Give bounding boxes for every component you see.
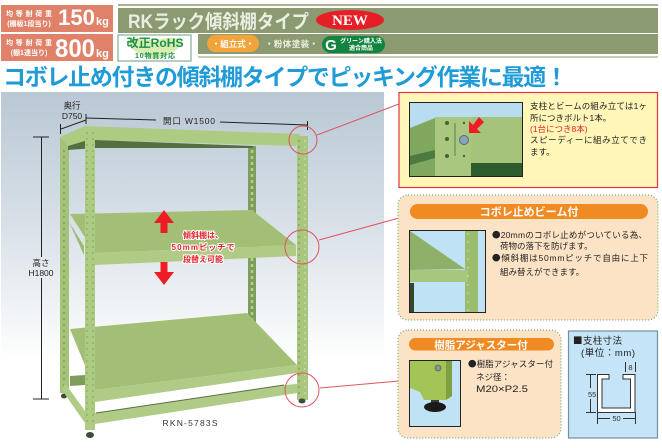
rear left upright bbox=[60, 137, 69, 398]
panel: spill-stop beam bbox=[398, 195, 658, 320]
spill-stop beam text: ●傾斜棚は50mmピッチで自由に上下 bbox=[492, 252, 648, 264]
shelf pitch note: 50mmピッチで bbox=[172, 243, 234, 252]
resin adjuster text bbox=[468, 358, 553, 395]
tag: green purchasing: G bbox=[325, 37, 337, 54]
bottom frame beams bbox=[62, 375, 297, 424]
height dimension: 高さ bbox=[32, 258, 50, 268]
depth dimension: 奥行 bbox=[63, 100, 81, 110]
badge: uniform load 800kg: 800 bbox=[55, 35, 95, 63]
up arrow bbox=[154, 210, 174, 233]
tag: assembly type: ・組立式・ bbox=[212, 39, 254, 49]
height dimension: H1800 bbox=[28, 268, 54, 278]
title band bbox=[118, 4, 658, 58]
panel: bolt assembly bbox=[399, 92, 658, 188]
height dimension bbox=[28, 137, 54, 399]
bolt assembly text bbox=[530, 101, 647, 157]
callout: beam circle and leader bbox=[285, 218, 399, 264]
bolt assembly text: 支柱とビームの組み立ては1ヶ bbox=[530, 101, 647, 111]
spill-stop beam heading bbox=[410, 204, 648, 219]
down arrow bbox=[154, 262, 174, 285]
tag: green purchasing: 適合商品 bbox=[349, 44, 373, 52]
bolt assembly text: スピーディーに組み立てでき bbox=[530, 135, 647, 145]
bolt assembly text: 所につきボルト1本。 bbox=[530, 113, 611, 123]
resin adjuster text: ●樹脂アジャスター付 bbox=[468, 358, 553, 370]
depth dimension: D750 bbox=[62, 111, 82, 121]
tag: assembly type bbox=[207, 35, 259, 52]
panel: resin adjuster bbox=[398, 330, 561, 438]
bolt assembly text: ます。 bbox=[530, 147, 555, 157]
bolt assembly text: (1台につき8本) bbox=[530, 124, 588, 134]
badge: uniform load 150kg bbox=[1, 5, 113, 32]
model number: RKN-5783S bbox=[162, 418, 218, 428]
spill-stop beam text: 組み替えができます。 bbox=[500, 267, 584, 277]
product title: RKラック傾斜棚タイプ bbox=[128, 11, 309, 33]
dimension: 55: 55 bbox=[588, 390, 596, 399]
upright dimensions heading: ■支柱寸法 bbox=[573, 333, 622, 347]
panel: upright dimensions bbox=[568, 331, 658, 438]
photo: bolt joint bbox=[410, 102, 522, 176]
resin adjuster heading bbox=[409, 338, 554, 352]
new badge bbox=[316, 10, 384, 30]
badge: RoHS compliance: 改正RoHS bbox=[126, 35, 184, 50]
tag: green purchasing bbox=[322, 36, 385, 54]
shelf pitch note: 段替え可能 bbox=[183, 254, 223, 264]
badge: uniform load 800kg: 均等耐荷重 bbox=[6, 38, 52, 47]
rear right upright bbox=[248, 146, 256, 322]
resin adjuster heading: 樹脂アジャスター付 bbox=[434, 338, 528, 352]
shelf pitch note bbox=[172, 230, 234, 264]
bottom shelf bbox=[70, 313, 297, 402]
badge: uniform load 150kg: (棚板1段当り) bbox=[7, 19, 51, 28]
top shelf bbox=[60, 126, 300, 150]
width dimension bbox=[86, 116, 308, 130]
front right upright bbox=[297, 136, 308, 404]
callout: adjuster circle and leader bbox=[285, 373, 399, 407]
tag: powder coating: ・粉体塗装・ bbox=[265, 39, 318, 49]
badge: RoHS compliance bbox=[118, 35, 191, 61]
spill-stop beam text bbox=[492, 229, 648, 277]
spill-stop beam text: 荷物の落下を防げます。 bbox=[500, 241, 593, 251]
depth dimension bbox=[60, 100, 86, 134]
badge: RoHS compliance: 10物質対応 bbox=[135, 51, 175, 60]
resin adjuster text: M20×P2.5 bbox=[476, 384, 528, 395]
upright dimensions heading: (単位：mm) bbox=[581, 347, 635, 359]
spill-stop beam heading: コボレ止めビーム付 bbox=[480, 204, 578, 218]
badge: uniform load 150kg: 均等耐荷重 bbox=[6, 9, 52, 18]
photo: beam close-up bbox=[410, 230, 486, 313]
badge: uniform load 800kg: kg bbox=[96, 48, 109, 60]
photo: adjuster foot bbox=[410, 360, 460, 426]
shelf pitch note: 傾斜棚は、 bbox=[183, 230, 223, 240]
new badge: NEW bbox=[332, 13, 368, 29]
resin adjuster text: ネジ径： bbox=[476, 372, 510, 382]
front left upright bbox=[85, 127, 95, 438]
diagram: channel cross-section bbox=[586, 362, 636, 424]
badge: uniform load 800kg bbox=[1, 34, 113, 63]
middle shelf bbox=[69, 210, 296, 265]
dimension: 50: 50 bbox=[612, 414, 621, 423]
width dimension: 開口 W1500 bbox=[163, 116, 215, 126]
tag: green purchasing: グリーン購入法 bbox=[340, 37, 382, 45]
callout: bolt circle and leader bbox=[289, 104, 399, 154]
badge: uniform load 800kg: (棚1連当り) bbox=[11, 48, 47, 57]
badge: uniform load 150kg: kg bbox=[96, 16, 109, 28]
main headline: コボレ止め付きの傾斜棚タイプでピッキング作業に最適！ bbox=[3, 64, 568, 90]
upright dimensions heading bbox=[573, 333, 635, 359]
spill-stop beam text: ●20mmのコボレ止めがついている為、 bbox=[492, 229, 647, 241]
badge: uniform load 150kg: 150 bbox=[58, 5, 95, 30]
dimension: 8: 8 bbox=[628, 363, 633, 372]
panel: rack illustration bbox=[1, 92, 384, 438]
